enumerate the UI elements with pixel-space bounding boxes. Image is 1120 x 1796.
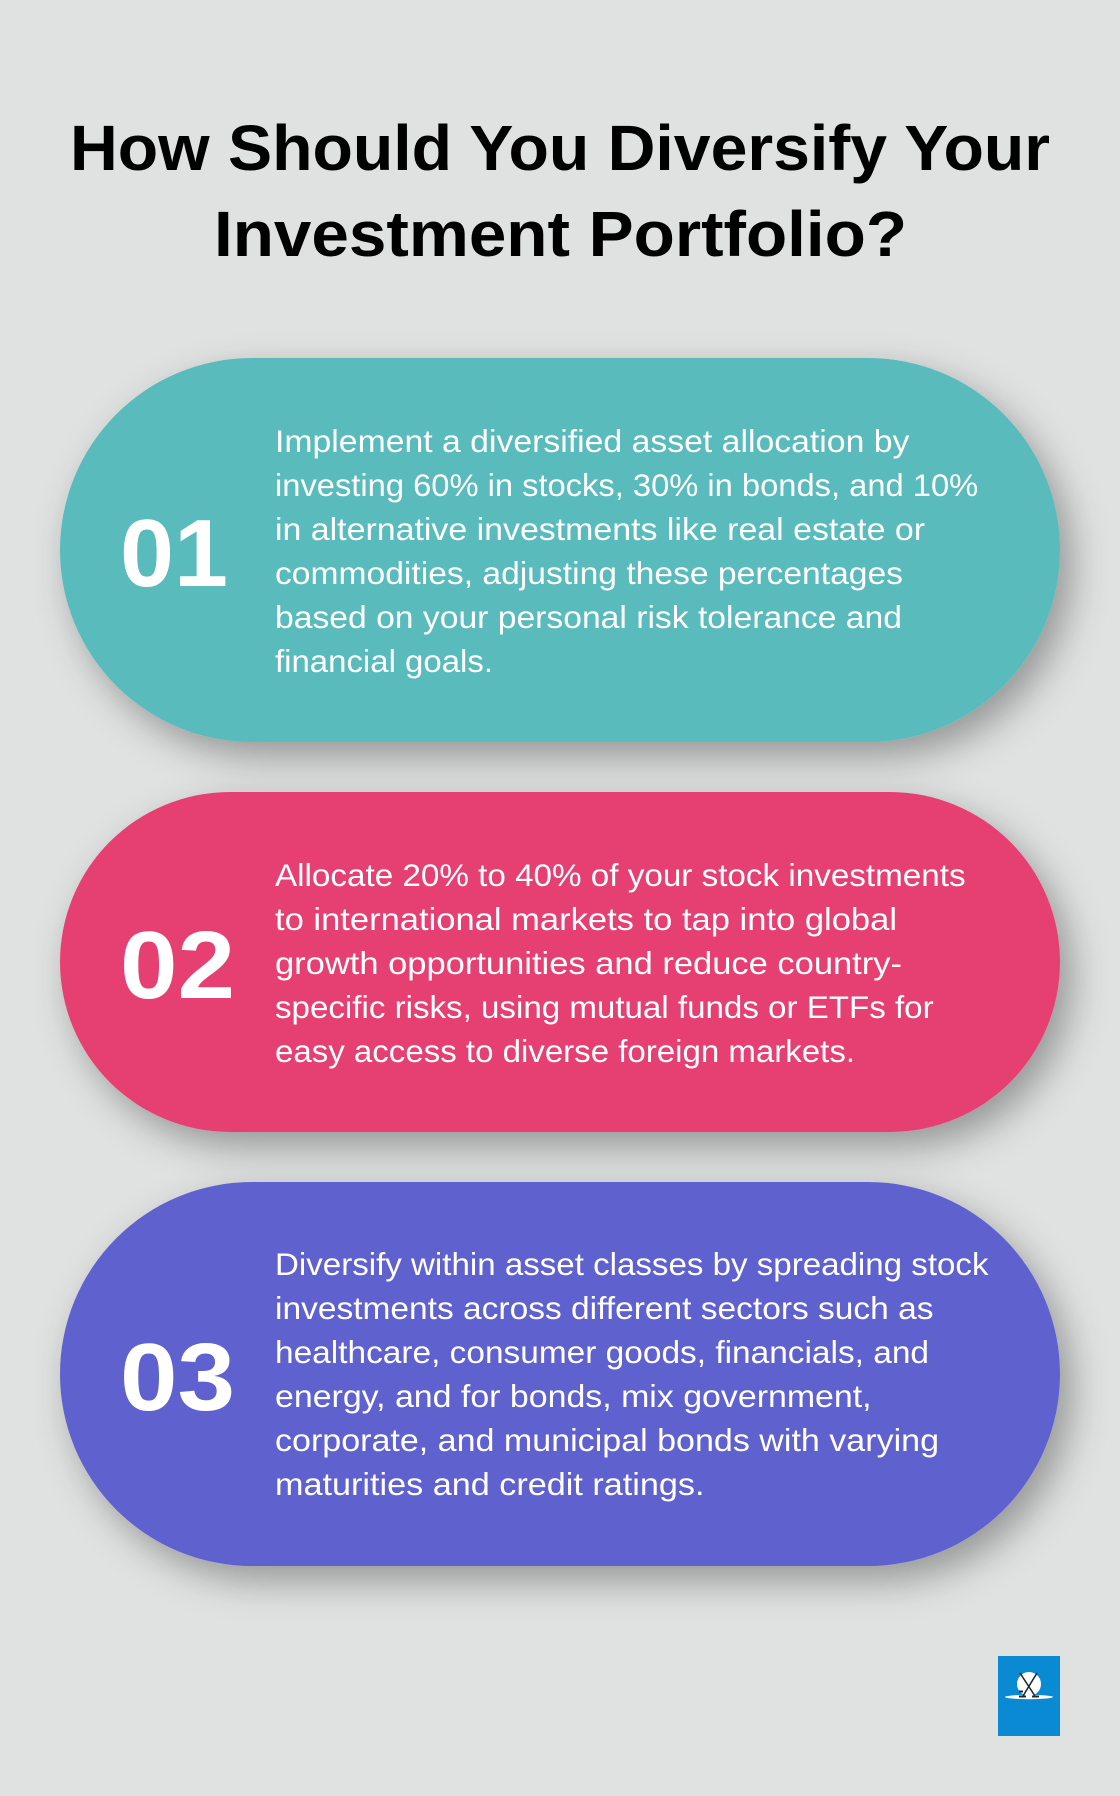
body text 01: investing 60% in stocks, 30% in bonds, and 10% xyxy=(275,467,978,503)
number 03: 03 xyxy=(120,1324,235,1431)
body text 01: Implement a diversified asset allocation by xyxy=(275,423,910,459)
pill background 02 xyxy=(60,792,1060,1132)
body text 03: maturities and credit ratings. xyxy=(275,1466,704,1502)
body text 03: energy, and for bonds, mix government, xyxy=(275,1378,872,1414)
body text 02: Allocate 20% to 40% of your stock investments xyxy=(275,857,966,893)
body text 03: corporate, and municipal bonds with varying xyxy=(275,1422,939,1458)
body text 02: specific risks, using mutual funds or ETFs for xyxy=(275,989,934,1025)
pill background 01 xyxy=(60,358,1060,742)
body text 03 xyxy=(275,1246,989,1502)
body text 01: commodities, adjusting these percentages xyxy=(275,555,903,591)
panel: step 03 xyxy=(60,1182,1060,1566)
title xyxy=(70,112,1050,270)
number 02: 02 xyxy=(120,912,235,1019)
icon: hockey sticks logo xyxy=(998,1656,1060,1736)
body text 02: growth opportunities and reduce country- xyxy=(275,945,902,981)
body text 01: in alternative investments like real estate or xyxy=(275,511,925,547)
body text 03: Diversify within asset classes by spreading stock xyxy=(275,1246,989,1282)
body text 01: financial goals. xyxy=(275,643,493,679)
panel: step 02 xyxy=(60,792,1060,1132)
panel: step 01 xyxy=(60,358,1060,742)
title: Investment Portfolio? xyxy=(214,198,907,270)
body text 02 xyxy=(275,857,966,1069)
body text 02: easy access to diverse foreign markets. xyxy=(275,1033,855,1069)
body text 03: healthcare, consumer goods, financials, and xyxy=(275,1334,929,1370)
body text 03: investments across different sectors such as xyxy=(275,1290,934,1326)
body text 02: to international markets to tap into global xyxy=(275,901,897,937)
pill background 03 xyxy=(60,1182,1060,1566)
body text 01 xyxy=(275,423,978,679)
body text 01: based on your personal risk tolerance and xyxy=(275,599,902,635)
title: How Should You Diversify Your xyxy=(70,112,1050,184)
number 01: 01 xyxy=(120,500,228,607)
